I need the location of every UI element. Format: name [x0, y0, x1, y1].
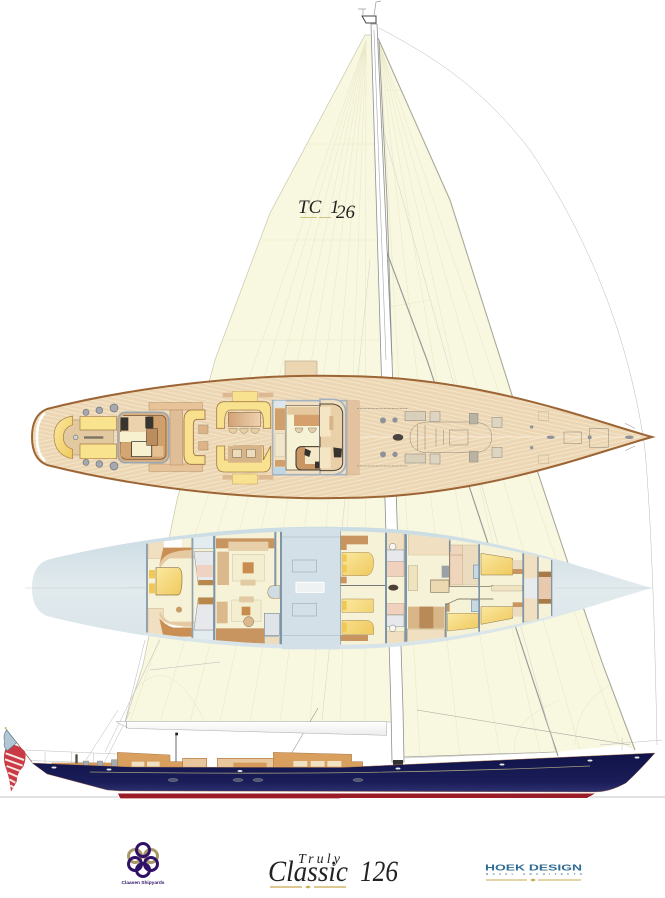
foredeck fittings [357, 409, 635, 466]
mid cockpit seat [184, 410, 208, 464]
forward bathrooms [340, 531, 407, 645]
mainsail [125, 35, 392, 722]
guest accommodation aft [146, 532, 282, 644]
logo: Truly Classic 126: 126 [360, 855, 398, 888]
sail logo: TC 126: 1 [330, 197, 340, 218]
aft guard rail [25, 750, 117, 763]
interior clipped to the hull [146, 531, 552, 645]
red boot top forward [118, 794, 595, 798]
forward rail [405, 738, 662, 758]
logo: Truly Classic 126: Classic [268, 855, 348, 888]
forepeak [522, 553, 552, 623]
lower deck plan [25, 526, 652, 650]
logo: Hoek Design: NAVAL ARCHITECTS [486, 872, 582, 876]
hull [32, 753, 655, 792]
aft deck fittings [54, 391, 347, 484]
red boot top [119, 794, 340, 798]
sail logo: TC 126: 26 [336, 202, 356, 223]
sheer stripe [90, 766, 590, 773]
aft coach roof [52, 752, 274, 768]
logo: Claasen Shipyards: Claasen Shipyards [122, 880, 165, 886]
headsail [372, 38, 635, 757]
flag [4, 727, 32, 792]
side benches [149, 403, 202, 471]
aft cockpit seating [54, 416, 117, 459]
main deck plan [20, 360, 660, 507]
aft deckhouse [118, 412, 169, 463]
sail logo: TC 126: TC [298, 197, 322, 218]
profile view [4, 722, 662, 798]
aft profile [4, 722, 387, 798]
boom [116, 722, 387, 763]
main coach roof [273, 752, 363, 767]
main deckhouse forward end [320, 399, 359, 475]
logo: Hoek Design [485, 862, 582, 882]
saloon day head corridor [317, 525, 338, 652]
logo: Hoek Design: HOEK DESIGN [485, 862, 582, 872]
guest cockpit [217, 391, 273, 484]
hull fairleads [52, 756, 640, 772]
teak deck surface [31, 374, 656, 500]
aft sun deck hatch [285, 361, 317, 377]
aft stateroom [146, 539, 195, 637]
forward half of main deck [320, 399, 635, 475]
logo: Truly Classic 126: Truly [298, 852, 341, 867]
sails [125, 35, 635, 757]
rigging lines [86, 28, 657, 768]
main deckhouse [273, 401, 347, 475]
galley [407, 532, 463, 642]
main salon [216, 532, 282, 644]
forward crew cabins [445, 535, 523, 643]
logo: Claasen Shipyards [122, 844, 165, 886]
sail logo: TC 126 [298, 197, 356, 223]
saloon stair area [127, 528, 340, 649]
mast collar [393, 434, 403, 441]
forward accommodation [340, 531, 552, 645]
winches aft [83, 404, 118, 470]
centre line [25, 587, 652, 589]
ground line [0, 796, 118, 798]
aft bathrooms [191, 536, 216, 640]
lower hull outline [32, 527, 652, 649]
logo: Truly Classic 126 [268, 852, 398, 888]
deck winches [380, 417, 634, 457]
portlights [168, 778, 363, 782]
forward guest cabins [340, 536, 385, 641]
mast [358, 1, 404, 765]
